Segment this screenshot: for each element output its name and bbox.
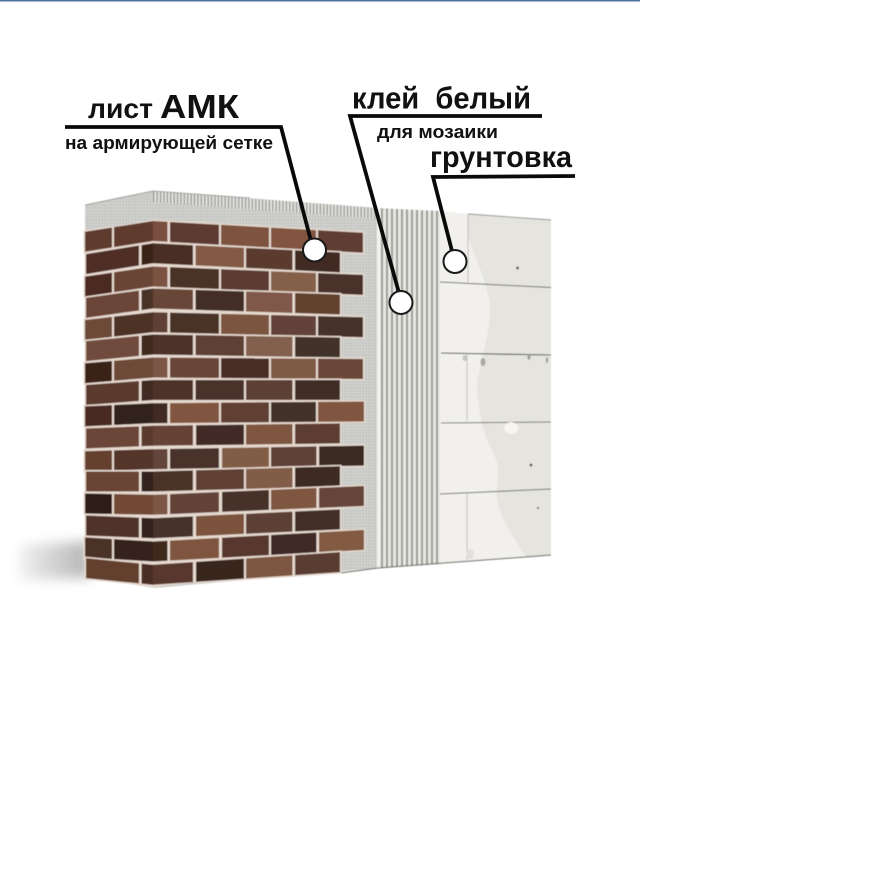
- layer: white glue with ribs: [377, 208, 440, 568]
- block joints: [340, 214, 551, 573]
- wall illustration: [85, 191, 551, 588]
- marker: [390, 291, 412, 314]
- callout: лист АМК: [65, 88, 326, 262]
- leader line: [433, 176, 575, 251]
- sublabel: для мозаики: [377, 122, 498, 142]
- label: грунтовка: [430, 141, 572, 174]
- wall shadow: [20, 541, 90, 580]
- label abbreviation: АМК: [160, 88, 240, 125]
- marker: [303, 238, 326, 262]
- leader line: [65, 127, 311, 241]
- callout: клей белый: [350, 80, 542, 314]
- brick cladding: [85, 221, 364, 585]
- sublabel: на армирующей сетке: [65, 132, 273, 153]
- marker: [444, 250, 466, 273]
- layer: aerated block with primer: [340, 211, 551, 573]
- label word: лист: [88, 93, 153, 124]
- top blue line: [0, 0, 640, 2]
- label: клей белый: [352, 80, 531, 116]
- leader line: [350, 116, 542, 293]
- block pores: [462, 267, 548, 559]
- layer: reinforcing mesh: [85, 191, 378, 588]
- callout: грунтовка: [430, 141, 575, 273]
- brick joints backing at corner: [112, 220, 197, 587]
